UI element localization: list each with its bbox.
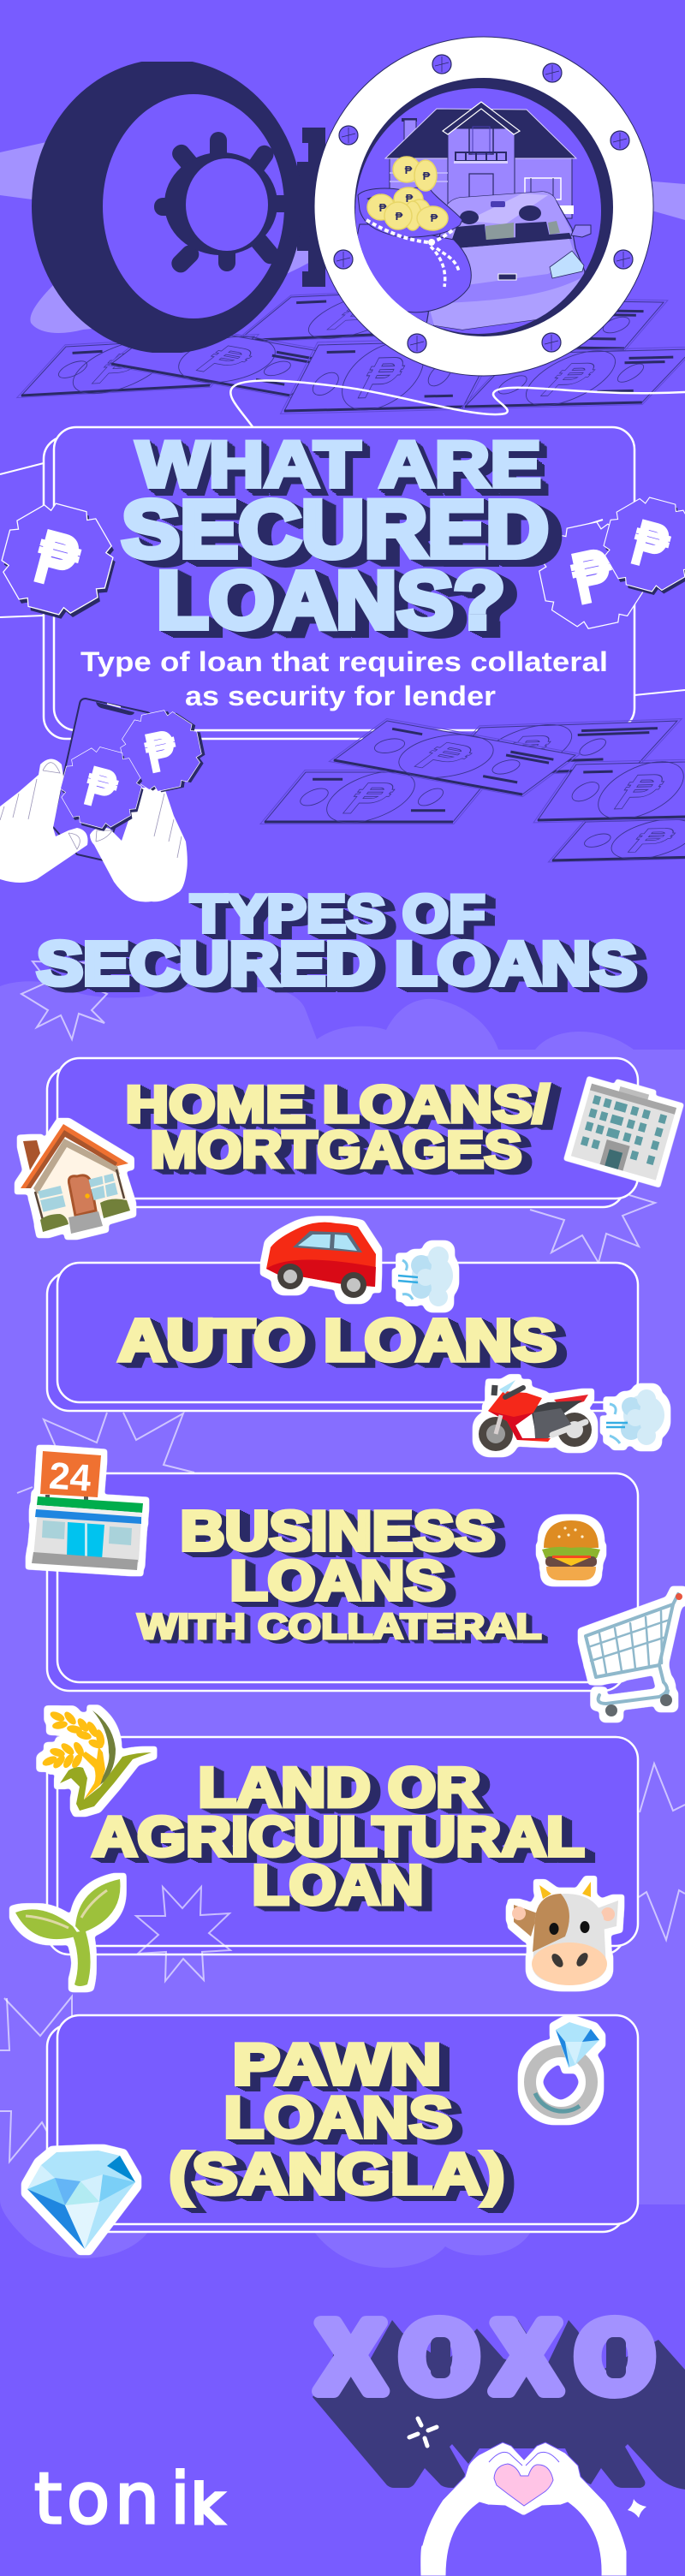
background star in card xyxy=(136,1887,230,1981)
money bills under the vault: ₱ xyxy=(527,354,611,407)
peso coin right back xyxy=(532,515,653,636)
money bills lower right xyxy=(260,718,685,862)
card: land or agricultural loan: AGRICULTURAL xyxy=(92,1805,584,1868)
peso coin right front: ₱ xyxy=(625,507,676,585)
coin peso letters: ₱ xyxy=(396,210,403,223)
xoxo letter counters xyxy=(431,2337,626,2378)
money bills under the vault: ₱ xyxy=(348,344,416,411)
sparkle xyxy=(409,2418,437,2446)
house xyxy=(385,102,576,218)
door body xyxy=(32,59,302,354)
section heading: SECURED LOANS xyxy=(37,931,637,998)
lighter background panel with clouds xyxy=(0,981,685,2268)
title: LOANS? xyxy=(157,555,505,645)
connector lines around title box xyxy=(0,463,685,695)
icon: convenience store: 24 xyxy=(48,1455,92,1500)
card: home loans xyxy=(47,1058,638,1207)
money bills under the vault: ₱ xyxy=(183,337,269,384)
peso coin right front xyxy=(595,489,685,604)
money bills lower right: ₱ xyxy=(485,726,566,775)
background stars xyxy=(0,961,685,2162)
card: pawn loans: LOANS xyxy=(224,2085,452,2151)
icon: cow xyxy=(512,1882,618,1985)
peso coin left xyxy=(0,494,126,628)
phone coin right: ₱ xyxy=(140,718,182,785)
hand details xyxy=(0,763,182,858)
title: SECURED xyxy=(122,485,549,575)
white curve line across top xyxy=(230,381,685,428)
subtitle: Type of loan that requires collateral xyxy=(80,646,608,677)
money bills lower right: ₱ xyxy=(401,734,490,780)
right hand xyxy=(90,788,188,901)
card: home loans: HOME LOANS/ xyxy=(125,1075,550,1133)
left hand xyxy=(0,759,87,883)
icon: sprout xyxy=(15,1879,120,1986)
door hinge xyxy=(297,128,331,287)
section heading: TYPES OF xyxy=(190,885,485,943)
title xyxy=(122,428,549,645)
phone coin left xyxy=(53,740,151,838)
light swoosh behind vault xyxy=(0,135,685,333)
icon: wheat xyxy=(41,1710,152,1811)
peso coin right back: ₱ xyxy=(565,532,621,620)
bolts xyxy=(334,55,633,353)
xoxo long shadow xyxy=(313,2318,685,2490)
card: land or agricultural loan xyxy=(47,1737,638,1954)
subtitle xyxy=(80,646,608,711)
card: land or agricultural loan: LAND OR xyxy=(199,1756,481,1818)
money bills under the vault: ₱ xyxy=(80,343,160,393)
icon: red car xyxy=(266,1223,376,1298)
card: business loans xyxy=(47,1473,638,1691)
coin peso letters: ₱ xyxy=(423,170,431,182)
subtitle: as security for lender xyxy=(185,681,496,711)
logo: tonik: toni xyxy=(34,2459,190,2540)
section heading xyxy=(37,885,637,998)
card: pawn loans: PAWN xyxy=(233,2032,442,2097)
money bills under the vault: ₱ xyxy=(313,294,401,338)
title: WHAT ARE xyxy=(136,428,541,502)
door wheel xyxy=(154,132,308,277)
icon: office building xyxy=(571,1079,678,1181)
heart hands xyxy=(420,2442,627,2576)
card: land or agricultural loan: LOAN xyxy=(252,1853,423,1916)
card: business loans: LOANS xyxy=(229,1550,445,1611)
phone coin right xyxy=(115,704,211,799)
money bills lower right: ₱ xyxy=(618,821,685,860)
coin peso letters: ₱ xyxy=(406,192,414,205)
money bag xyxy=(357,187,471,312)
card: business loans: BUSINESS xyxy=(180,1500,495,1562)
coin peso letters: ₱ xyxy=(405,164,413,176)
xoxo text: XOXO xyxy=(318,2301,653,2412)
card: home loans: MORTGAGES xyxy=(151,1121,522,1178)
vault door xyxy=(32,59,331,354)
phone with hands xyxy=(0,699,211,901)
coin peso letters: ₱ xyxy=(379,201,387,214)
porthole with collateral xyxy=(314,37,653,376)
icon: burger xyxy=(542,1520,600,1580)
icon: motorbike xyxy=(479,1380,592,1451)
money bills under the vault xyxy=(17,287,685,413)
gold coins xyxy=(367,157,448,230)
logo: tonik: k xyxy=(192,2473,223,2536)
card: pawn loans xyxy=(47,2015,638,2232)
icon: convenience store xyxy=(32,1451,143,1570)
card: auto loans: AUTO LOANS xyxy=(118,1307,557,1373)
icon: house xyxy=(21,1124,130,1234)
card: pawn loans: (SANGLA) xyxy=(170,2142,505,2207)
icon: car exhaust puff xyxy=(398,1246,453,1306)
card: business loans: WITH COLLATERAL xyxy=(137,1606,541,1646)
icon: shopping cart xyxy=(586,1593,682,1716)
icon: diamond xyxy=(27,2151,135,2249)
card: auto loans xyxy=(47,1263,638,1411)
car xyxy=(426,192,591,330)
money bills lower right: ₱ xyxy=(331,774,408,823)
coin peso letters xyxy=(379,164,438,224)
phone xyxy=(52,699,152,860)
icon: motorbike exhaust puff xyxy=(606,1389,664,1445)
icon: diamond ring xyxy=(530,2022,599,2113)
money bills lower right: ₱ xyxy=(604,764,676,819)
heart xyxy=(494,2464,553,2506)
peso coin left: ₱ xyxy=(27,514,88,606)
phone coin left: ₱ xyxy=(79,755,123,823)
coin peso letters: ₱ xyxy=(431,211,438,224)
title box xyxy=(44,427,634,739)
star sparkle xyxy=(628,2499,646,2518)
